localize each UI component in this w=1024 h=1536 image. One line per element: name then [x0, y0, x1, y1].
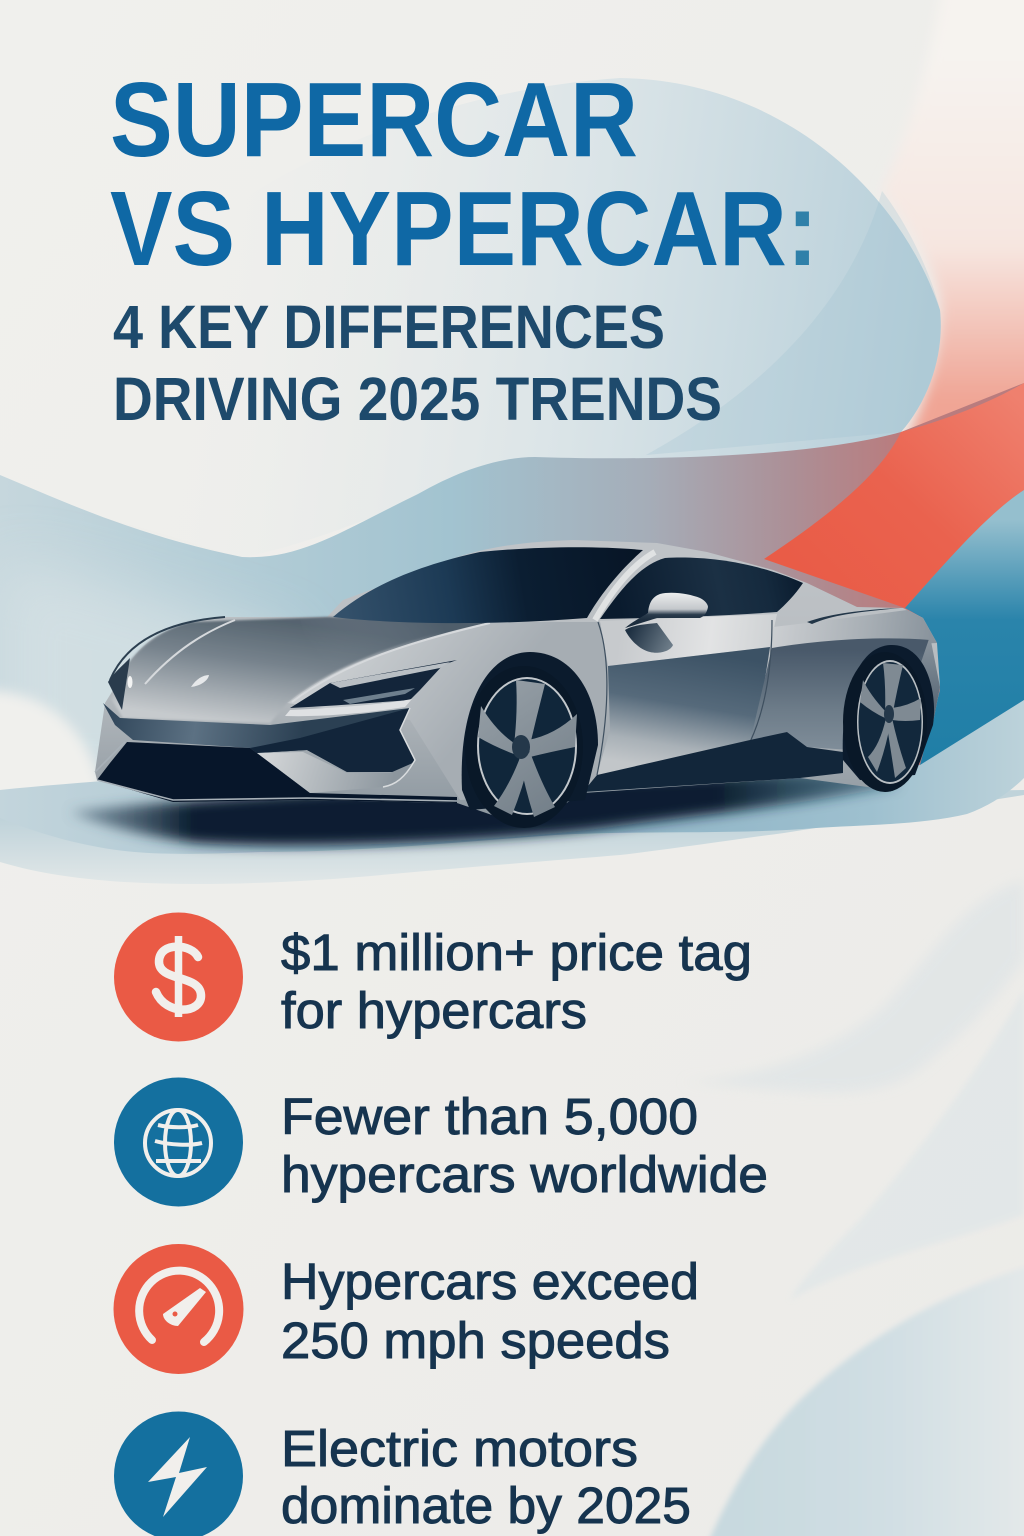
spokes [860, 663, 921, 778]
upper blue swirl [0, 78, 941, 557]
mirror [625, 593, 708, 653]
stat text: Hypercars exceed [281, 1253, 699, 1310]
car shadow [70, 770, 900, 846]
stat text: $1 million+ price tag [281, 924, 752, 981]
A-pillar [595, 552, 655, 620]
stat text: dominate by 2025 [281, 1477, 691, 1534]
front blade [257, 752, 415, 793]
stat text [281, 1420, 691, 1534]
spokes [478, 680, 577, 817]
stat 4: electric [114, 1412, 691, 1536]
bumper edges [95, 742, 457, 801]
subtitle [113, 293, 722, 433]
stat text [281, 1088, 768, 1203]
door upper panel [600, 614, 777, 666]
door lower panel [597, 647, 770, 775]
faint lower swirls [680, 880, 1024, 1093]
stat text [281, 924, 752, 1039]
stat 3: speed [114, 1244, 699, 1374]
stat text: 250 mph speeds [281, 1312, 670, 1369]
car illustration [70, 540, 940, 846]
side skirt [583, 732, 843, 792]
icon: speedometer [114, 1244, 244, 1374]
hood [112, 617, 490, 723]
title [110, 61, 818, 288]
title: VS HYPERCAR: [110, 170, 818, 288]
rear quarter upper [772, 610, 937, 650]
badge [191, 675, 209, 687]
left headlight sliver [108, 658, 130, 710]
ground wave [0, 790, 1024, 884]
icon: lightning bolt [114, 1412, 243, 1536]
subtitle: 4 KEY DIFFERENCES [113, 293, 665, 361]
stat 1: price [114, 912, 752, 1042]
title: SUPERCAR [110, 61, 638, 179]
stat 2: rarity [114, 1078, 768, 1206]
hood creases [145, 620, 490, 702]
fender [287, 622, 612, 800]
stat text: hypercars worldwide [281, 1146, 768, 1203]
car body [95, 540, 940, 827]
rear wheel [843, 645, 934, 792]
front wheel [462, 652, 598, 828]
icon: globe [114, 1078, 243, 1206]
red wave [764, 383, 1024, 608]
mouth [97, 742, 457, 803]
headlight [285, 660, 457, 716]
right air intake [250, 708, 415, 772]
stat text: Electric motors [281, 1420, 638, 1477]
subtitle: DRIVING 2025 TRENDS [113, 365, 722, 433]
middle wave band [0, 383, 1024, 800]
stat text: for hypercars [281, 982, 587, 1039]
stat text [281, 1253, 699, 1369]
icon: dollar [114, 912, 243, 1042]
stat text: Fewer than 5,000 [281, 1088, 698, 1145]
front panel [103, 703, 415, 772]
door lines [597, 620, 772, 775]
rear quarter lower [750, 638, 930, 760]
side window [600, 558, 803, 619]
teal wave [905, 490, 1024, 765]
windshield [333, 547, 643, 623]
rear vent [807, 608, 900, 624]
